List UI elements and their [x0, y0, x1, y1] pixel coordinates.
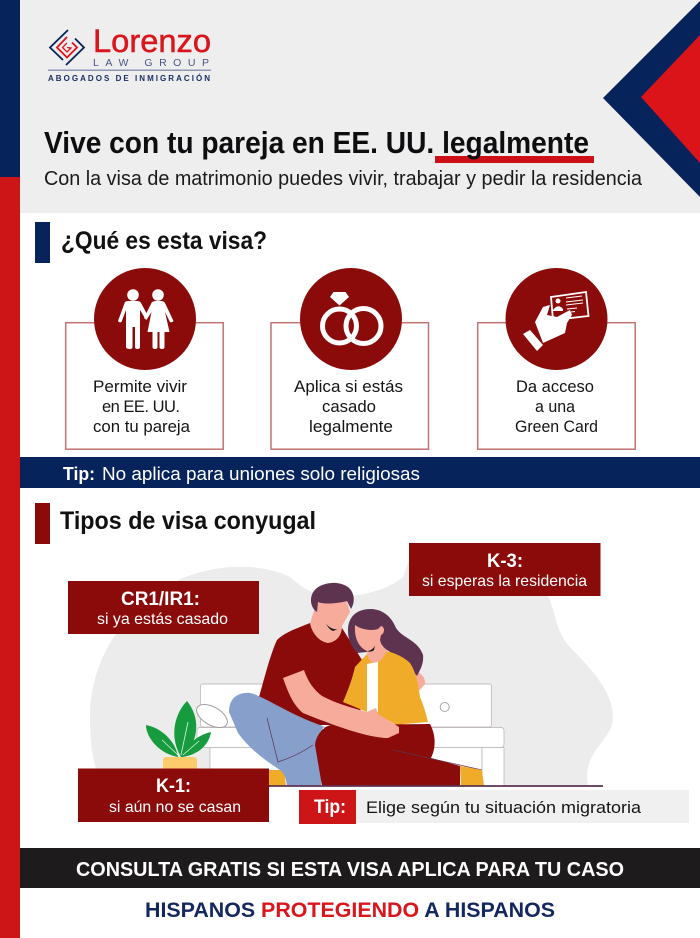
logo — [48, 23, 211, 83]
logo tagline: ABOGADOS DE INMIGRACIÓN — [48, 74, 210, 83]
label: CR1/IR1: si ya estás casado — [97, 611, 228, 628]
woman face — [355, 625, 387, 665]
card 3 text: Da acceso — [516, 378, 594, 396]
corner diamond — [603, 1, 700, 197]
label: K-1: si aún no se casan — [109, 799, 241, 816]
tip box — [299, 790, 689, 824]
woman jacket — [343, 651, 428, 727]
icon: couple — [94, 268, 196, 370]
label: K-3: K-3: — [487, 551, 523, 572]
card 1 text: con tu pareja — [93, 418, 191, 436]
call to action bar — [20, 848, 700, 888]
logo wordmark: Lorenzo — [93, 23, 211, 59]
man hand behind woman — [408, 668, 425, 692]
tip bar: No aplica para uniones solo religiosas — [102, 464, 420, 484]
section marker: que es — [35, 222, 50, 263]
cushion — [193, 700, 231, 732]
icon: wedding rings — [300, 268, 402, 370]
card 3 text: Green Card — [515, 418, 598, 436]
section marker: tipos — [35, 503, 50, 544]
illustration: couple on sofa — [90, 560, 613, 786]
man neck and head — [310, 596, 350, 643]
woman hair — [348, 609, 423, 676]
card 3 text: a una — [535, 398, 576, 416]
woman smile — [367, 645, 375, 652]
heading: tipos de visa conyugal: Tipos de visa conyugal — [60, 507, 316, 535]
icon: logo mark — [50, 30, 84, 65]
tip box: Tip: — [314, 797, 346, 818]
woman trousers — [315, 724, 460, 786]
card 2 text: casado — [322, 398, 376, 416]
man hair — [311, 583, 354, 612]
card 2 text: legalmente — [309, 418, 393, 436]
card 1 text: Permite vivir — [93, 378, 188, 396]
panel: card 3 — [478, 268, 635, 449]
woman shoe — [460, 766, 484, 786]
plant — [146, 701, 211, 786]
card 2 text: Aplica si estás — [294, 378, 403, 396]
woman shirt — [367, 662, 378, 712]
label: K-3 — [409, 543, 600, 596]
subtitle: Con la visa de matrimonio puedes vivir, trabajar y pedir la residencia — [44, 168, 643, 190]
tip box: Elige según tu situación migratoria — [366, 798, 642, 817]
title: Vive con tu pareja en EE. UU. legalmente — [44, 125, 589, 160]
card 3 text — [515, 378, 598, 436]
heading: que es esta visa: ¿Qué es esta visa? — [61, 227, 267, 255]
logo rule — [48, 70, 211, 71]
jeans seam — [267, 718, 313, 762]
left side stripe — [0, 0, 20, 938]
man arm — [283, 670, 399, 738]
sofa button — [440, 702, 449, 712]
ground line — [215, 785, 603, 787]
man shoe — [268, 770, 286, 786]
call to action bar: CONSULTA GRATIS SI ESTA VISA APLICA PARA TU CASO — [76, 859, 624, 881]
title underline — [435, 156, 594, 163]
label: K-3: si esperas la residencia — [422, 573, 587, 590]
tip bar — [20, 457, 700, 488]
background blob — [90, 560, 613, 786]
panel: header background — [20, 0, 700, 213]
man beard shadow — [326, 624, 338, 631]
icon: hand holding card — [506, 268, 608, 370]
card 1 text — [93, 378, 191, 436]
trouser seam — [393, 750, 482, 770]
card 2 text — [294, 378, 403, 436]
tip bar: Tip: — [63, 464, 95, 484]
slogan: HISPANOS PROTEGIENDO A HISPANOS — [145, 899, 555, 922]
logo subtitle: LAW GROUP — [93, 57, 209, 69]
label: K-1: K-1: — [156, 776, 191, 797]
man shirt — [259, 623, 362, 725]
sofa — [197, 684, 504, 786]
panel: card 1 — [66, 268, 223, 449]
label: CR1/IR1 — [68, 581, 259, 634]
card 1 text: en EE. UU. — [102, 398, 180, 416]
panel: card 2 — [271, 268, 428, 449]
label: CR1/IR1: CR1/IR1: — [121, 589, 200, 610]
label: K-1 — [78, 768, 269, 822]
man jeans — [229, 693, 323, 786]
